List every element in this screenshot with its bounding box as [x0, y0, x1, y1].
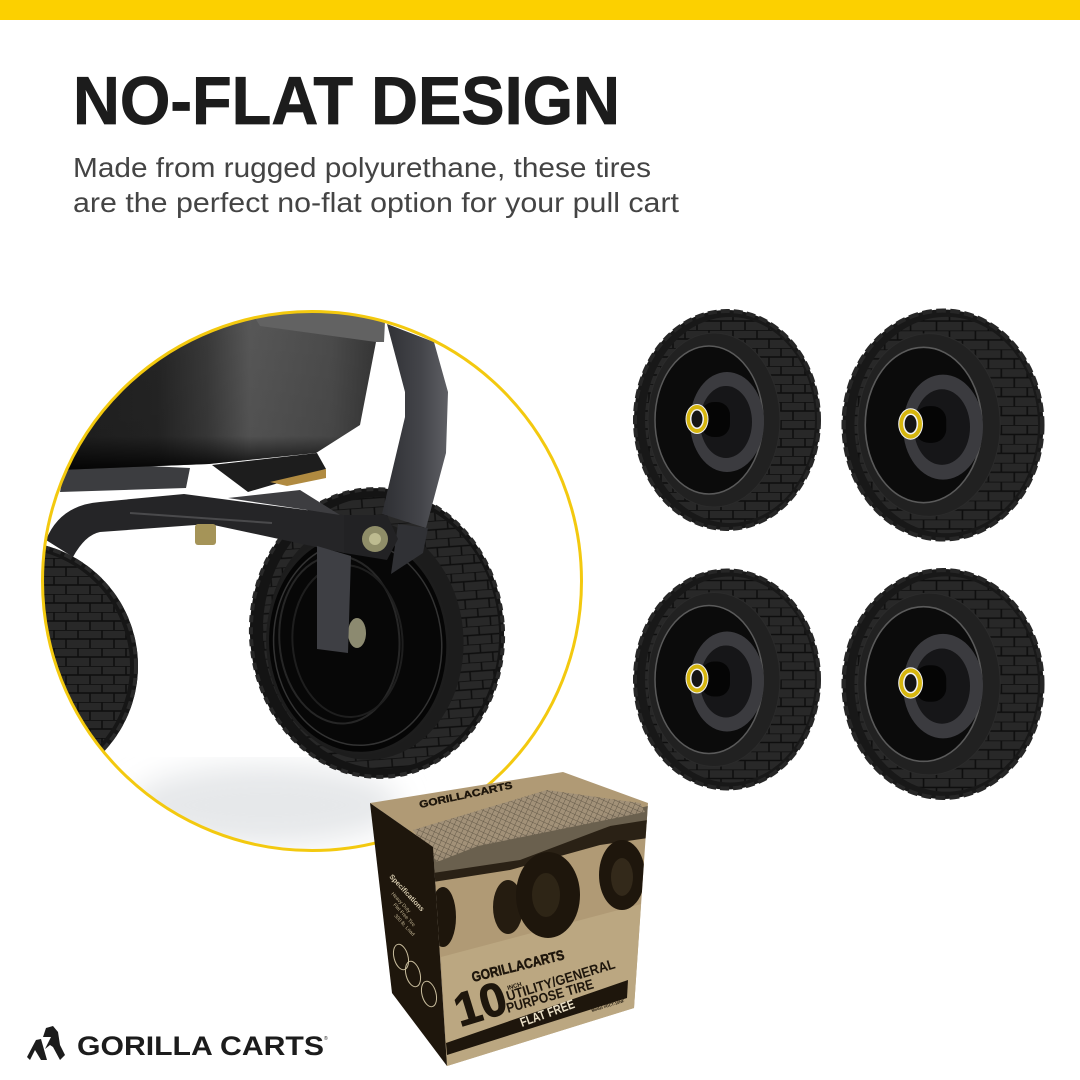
box label text: FLAT FREE	[518, 996, 577, 1030]
subtitle text	[73, 152, 679, 218]
box dark band	[446, 980, 628, 1055]
rear frame rail	[60, 466, 190, 492]
product box	[370, 772, 648, 1066]
panel: circular close-up photo of cart wheel	[0, 300, 582, 851]
yellow ring	[42, 312, 582, 850]
box label text: UTILITY/GENERAL	[504, 955, 617, 1004]
mount bracket	[212, 453, 326, 492]
box label text: INCH	[507, 982, 523, 992]
right wheel	[248, 487, 506, 779]
knuckle	[391, 524, 428, 574]
box cart image	[430, 806, 648, 947]
ground shadow	[130, 765, 400, 845]
icon: gorilla	[27, 1026, 65, 1060]
box label text	[447, 946, 626, 1037]
box mesh bed	[413, 790, 645, 862]
product wheel: bottom right	[843, 569, 1043, 799]
product wheel: bottom left	[634, 570, 820, 790]
box lower label panel	[441, 904, 641, 1066]
axle bar	[46, 494, 344, 557]
bolt	[362, 526, 388, 552]
hub bolt	[348, 618, 366, 648]
lower nut	[195, 524, 216, 545]
box left face: 300 lb. Load	[393, 913, 416, 938]
box label text: Model #GCT-10NF	[591, 998, 626, 1013]
subtitle text: are the perfect no-flat option for your pull cart	[73, 187, 679, 218]
registered mark: ®	[324, 1035, 328, 1042]
left wheel	[44, 546, 138, 751]
top yellow bar	[0, 0, 1080, 20]
brand name: GORILLA CARTS	[77, 1031, 324, 1061]
box left face: Flat Free Tire	[392, 902, 416, 928]
arm	[382, 324, 448, 528]
box front and top	[370, 772, 648, 1066]
tub	[68, 313, 385, 470]
box left face	[370, 803, 447, 1066]
top logo: GORILLACARTS	[418, 780, 514, 811]
box label text: PURPOSE TIRE	[504, 976, 595, 1016]
title: NO-FLAT DESIGN	[73, 63, 620, 139]
product wheel: top right	[843, 310, 1043, 540]
subtitle text: Made from rugged polyurethane, these tires	[73, 152, 651, 183]
fork leg	[317, 546, 351, 653]
brand logo	[27, 1026, 328, 1061]
box label text: 10	[447, 971, 513, 1037]
box left face: Specifications	[388, 874, 425, 913]
box left face: Heavy Duty	[390, 891, 412, 915]
box label text: GORILLACARTS	[470, 946, 566, 985]
brass plate	[270, 469, 326, 486]
product wheel: top left	[634, 310, 820, 530]
